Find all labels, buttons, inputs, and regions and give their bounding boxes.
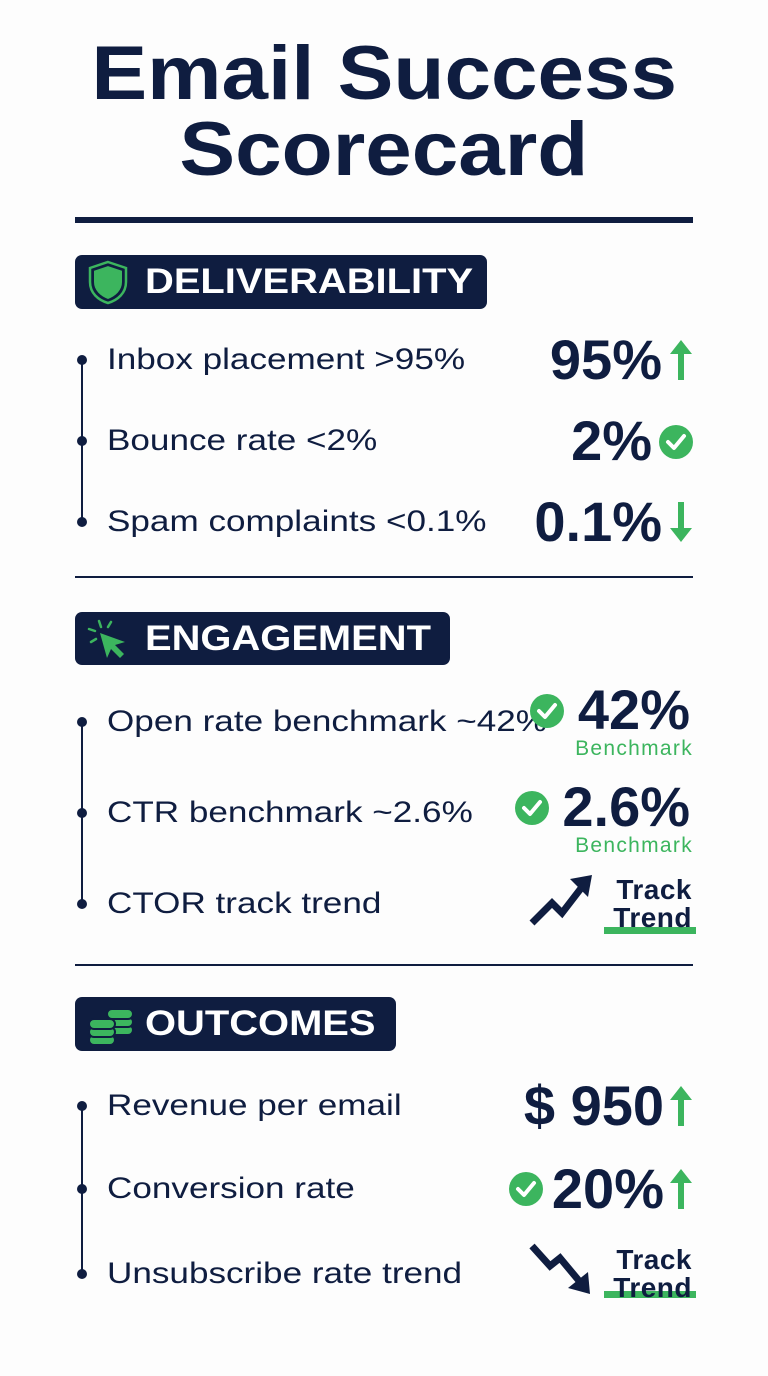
row: open rate: Open rate benchmark ~42% [107, 705, 547, 738]
panel: engagement: Benchmark [575, 737, 693, 760]
panel: engagement [75, 612, 696, 934]
heading: outcomes: OUTCOMES [145, 1004, 376, 1043]
heading: deliverability: DELIVERABILITY [145, 262, 473, 301]
title: Scorecard [180, 107, 588, 192]
panel: outcomes: Track [616, 1244, 692, 1275]
icon: coins [90, 1010, 132, 1044]
heading: engagement: ENGAGEMENT [145, 618, 431, 658]
panel: outcomes: 20% [552, 1157, 664, 1220]
icon: check [515, 791, 549, 825]
row: conversion: Conversion rate [107, 1172, 355, 1205]
panel: outcomes: Trend [613, 1272, 692, 1303]
icon: up arrow [670, 1086, 692, 1126]
icon: check [509, 1172, 543, 1206]
icon: trend up [530, 875, 592, 926]
underline [604, 1291, 696, 1298]
row: ctor: CTOR track trend [107, 887, 381, 920]
panel: engagement: Benchmark [575, 834, 693, 857]
panel: deliverability [75, 255, 693, 553]
panel: deliverability: 2% [571, 409, 652, 472]
title [91, 31, 677, 192]
title rule [75, 217, 693, 223]
icon: cursor click [88, 620, 125, 658]
underline [604, 927, 696, 934]
icon: check [530, 694, 564, 728]
panel: outcomes: $ 950 [524, 1074, 664, 1137]
row: revenue: Revenue per email [107, 1089, 402, 1122]
row: ctr: CTR benchmark ~2.6% [107, 796, 473, 829]
icon: check [659, 425, 693, 459]
row: inbox placement: Inbox placement >95% [107, 343, 465, 376]
heading: outcomes [75, 997, 396, 1051]
icon: shield [88, 260, 128, 304]
icon: up arrow [670, 340, 692, 380]
icon: up arrow [670, 1169, 692, 1209]
panel: outcomes [75, 997, 696, 1303]
heading: engagement [75, 612, 450, 665]
row: unsubscribe: Unsubscribe rate trend [107, 1257, 462, 1290]
panel: engagement: 2.6% [562, 775, 690, 838]
panel: engagement: 42% [578, 678, 690, 741]
title: Email Success [91, 31, 677, 116]
row: spam complaints: Spam complaints <0.1% [107, 505, 486, 538]
panel: engagement: Track [616, 874, 692, 905]
icon: down arrow [670, 502, 692, 542]
panel: deliverability: 0.1% [534, 490, 662, 553]
panel: deliverability: 95% [550, 328, 662, 391]
row: bounce rate: Bounce rate <2% [107, 424, 377, 457]
heading: deliverability [75, 255, 487, 309]
panel: engagement: Trend [613, 902, 692, 933]
icon: trend down [530, 1244, 590, 1294]
